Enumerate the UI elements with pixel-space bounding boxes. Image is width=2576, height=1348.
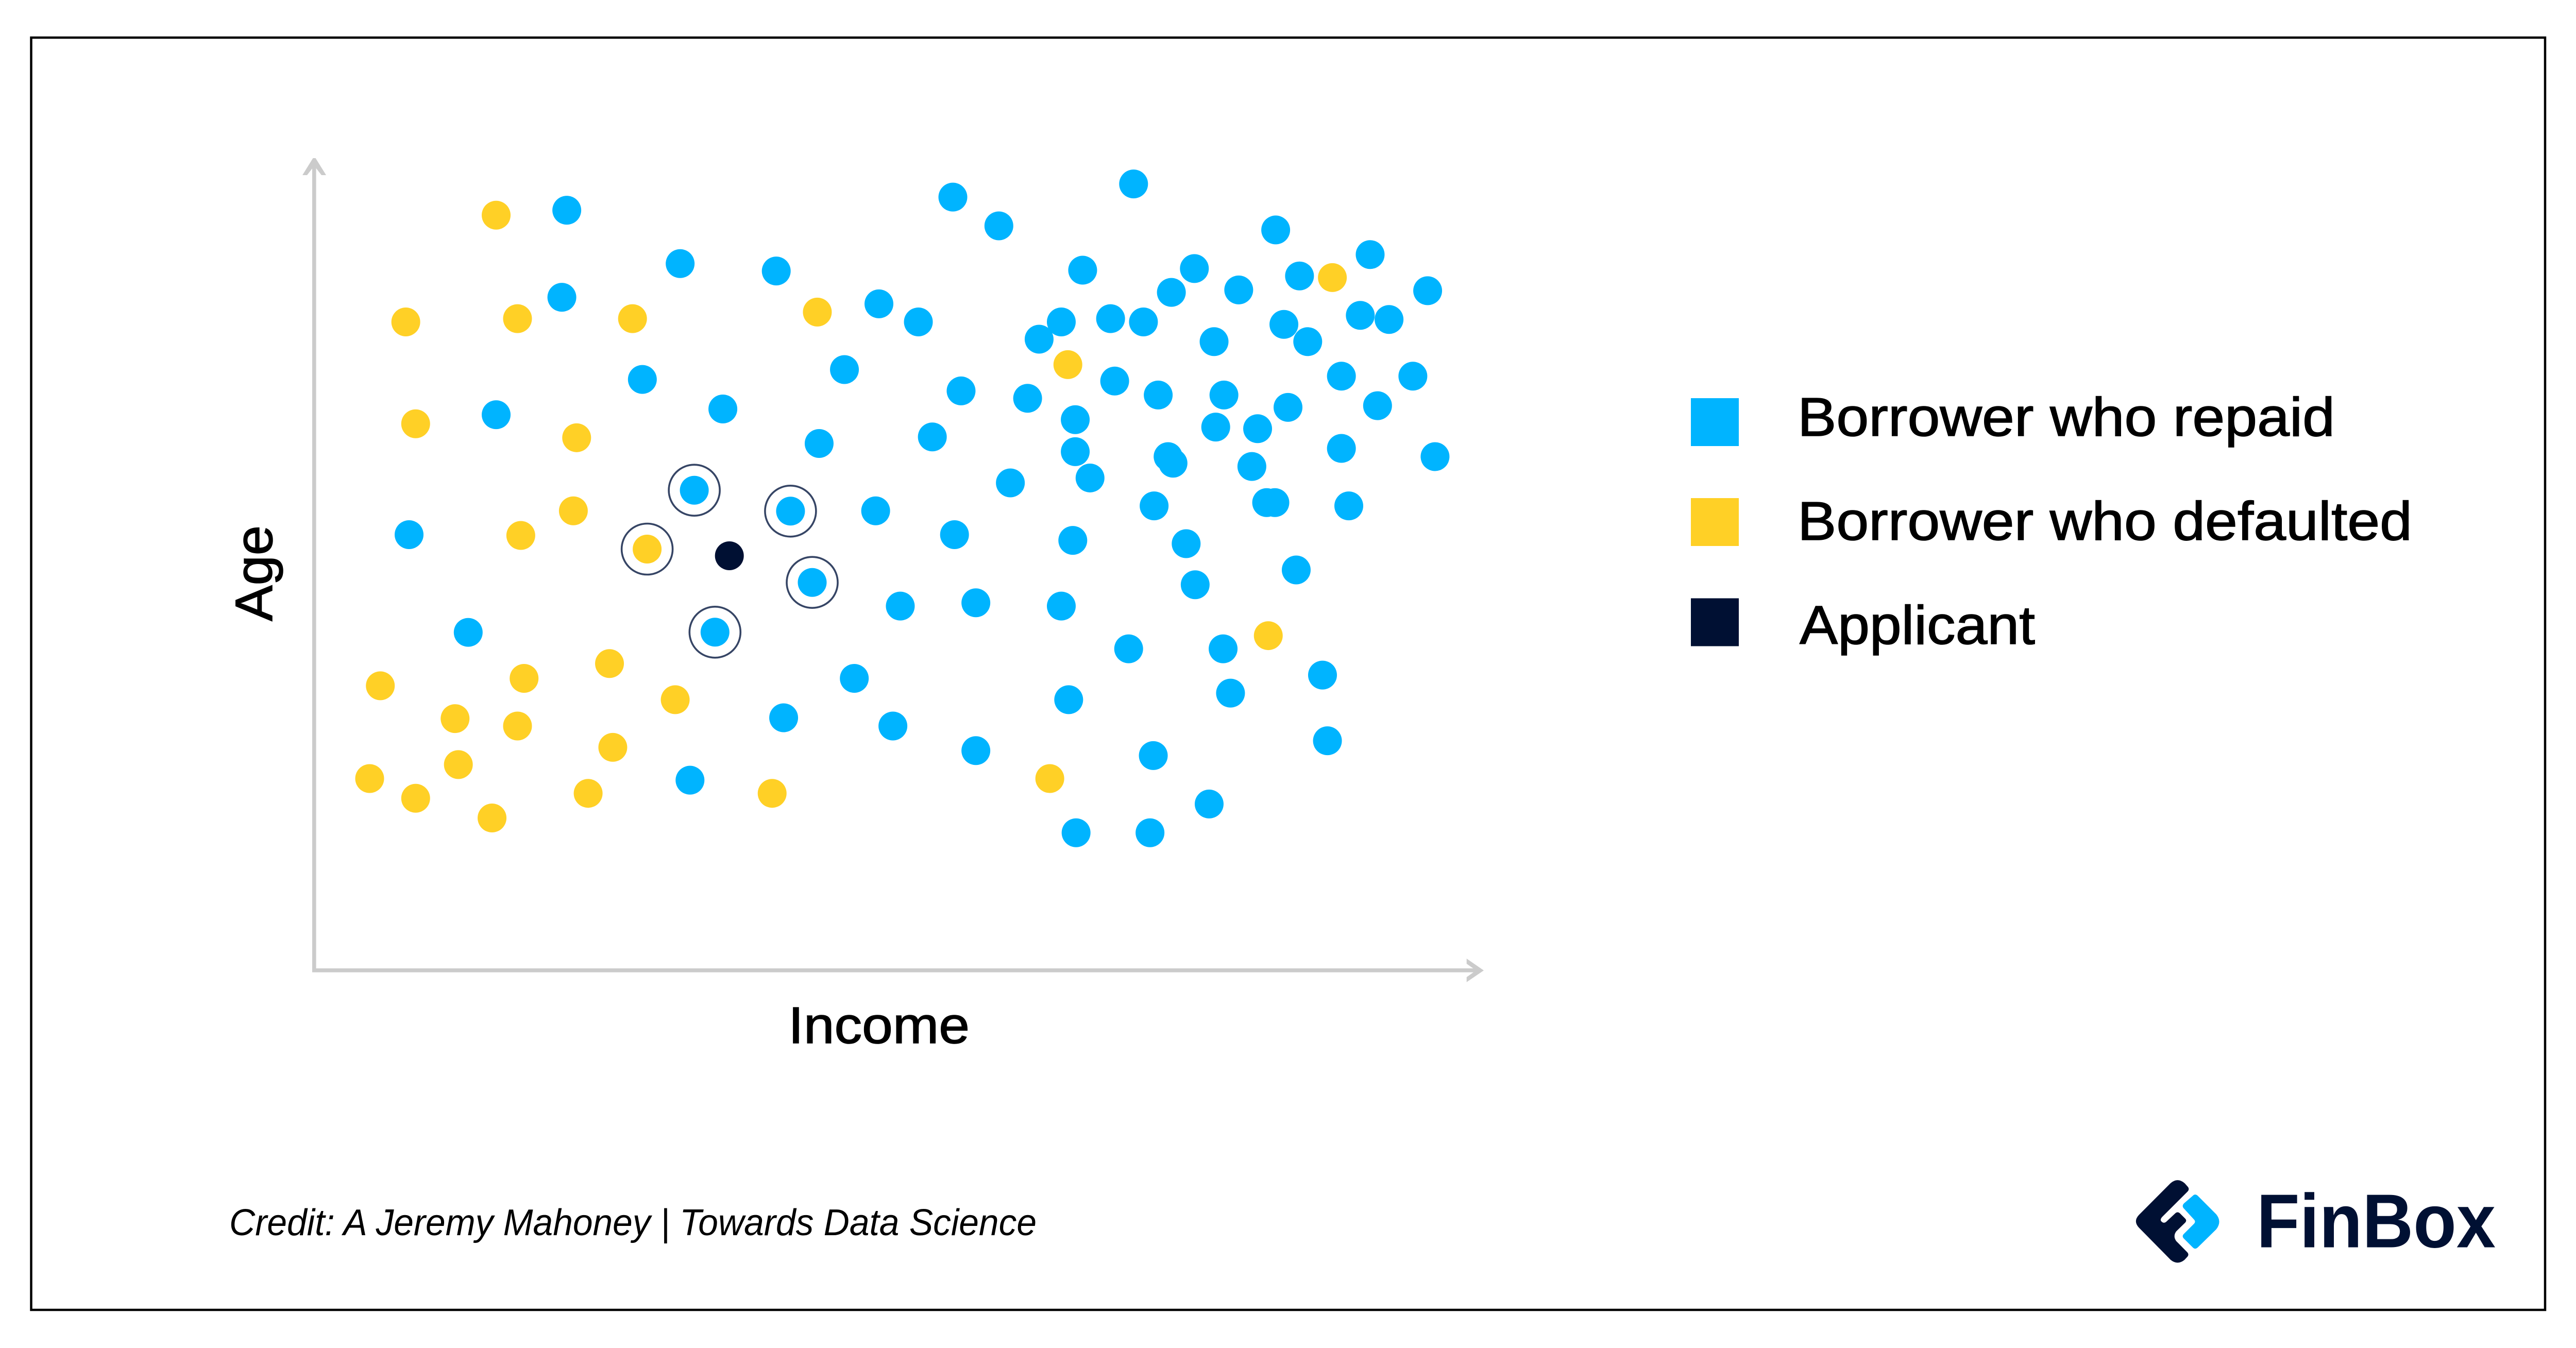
arrow: horizontal income axis xyxy=(312,959,1484,982)
data point: applicant xyxy=(715,541,744,570)
axis label: Age: Age xyxy=(225,525,283,621)
icon: FinBox mark xyxy=(2136,1180,2219,1262)
legend label: repaid: Borrower who repaid xyxy=(1798,387,2335,448)
legend swatch: applicant xyxy=(1691,599,1739,646)
data points: borrowers who repaid xyxy=(395,169,1449,847)
logo wordmark: FinBox xyxy=(2257,1179,2496,1264)
axis label: Income: Income xyxy=(788,997,970,1054)
legend swatch: repaid xyxy=(1691,398,1739,446)
nearest neighbours: ringed points around the applicant xyxy=(622,465,838,658)
arrow: vertical age axis xyxy=(302,158,326,972)
chart: scatter plot xyxy=(225,158,1484,1054)
legend label: applicant: Applicant xyxy=(1800,595,2035,656)
legend xyxy=(1691,387,2412,656)
legend label: defaulted: Borrower who defaulted xyxy=(1798,491,2412,552)
logo: FinBox xyxy=(2136,1179,2496,1264)
legend swatch: defaulted xyxy=(1691,498,1739,546)
credit line: Credit: A Jeremy Mahoney | Towards Data Science xyxy=(229,1202,1037,1243)
data points: borrowers who defaulted xyxy=(355,201,1347,832)
